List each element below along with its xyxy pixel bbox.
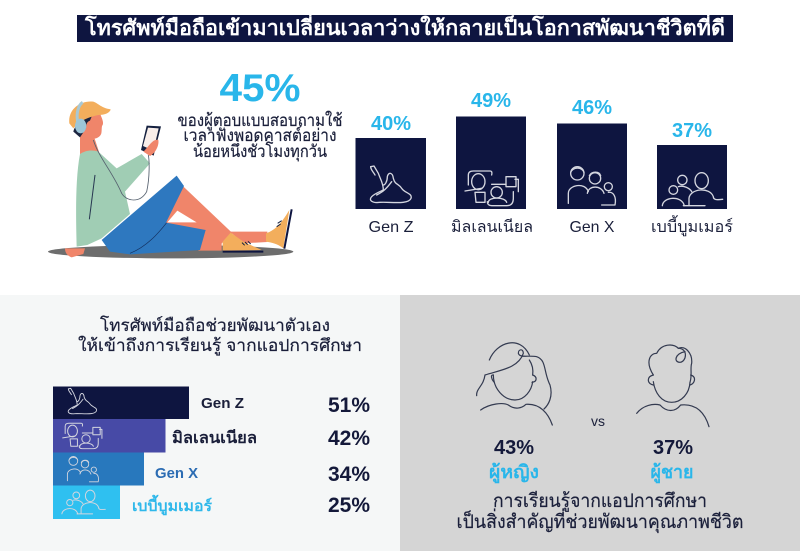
- conclusion text: [456, 490, 744, 534]
- icon: woman outline: [477, 343, 552, 425]
- stat: men 37%: ผู้ชาย: [650, 462, 694, 484]
- column: Gen Z: 40%: [371, 113, 411, 135]
- column: Baby Boomer: [651, 120, 733, 237]
- vs label: vs: [591, 413, 605, 429]
- conclusion text: การเรียนรู้จากแอปการศึกษา: [493, 490, 707, 512]
- bar: Gen X 34%: [53, 452, 370, 486]
- headline stat: 45%: [220, 67, 300, 110]
- bar: Baby Boomer 25%: 25%: [328, 494, 370, 517]
- column: Millennial: มิลเลนเนียล: [451, 218, 533, 236]
- headline stat: น้อยหนึ่งชั่วโมงทุกวัน: [193, 139, 327, 162]
- title banner: โทรศัพท์มือถือเข้ามาเปลี่ยนเวลาว่างให้กลายเป็นโอกาสพัฒนาชีวิตที่ดี: [84, 12, 725, 40]
- column: Baby Boomer: 37%: [672, 120, 712, 142]
- icon: man outline: [637, 345, 709, 427]
- bar: Gen Z 51%: 51%: [328, 394, 370, 417]
- stat: men 37%: [650, 437, 694, 484]
- column: Gen Z: Gen Z: [368, 219, 414, 236]
- bar: Gen X 34%: 34%: [328, 463, 370, 486]
- headline stat: เวลาฟังพอดคาสต์อย่าง: [184, 126, 336, 145]
- panel heading: โทรศัพท์มือถือช่วยพัฒนาตัวเอง: [100, 315, 330, 335]
- column: Millennial: [451, 90, 533, 236]
- stat: men 37%: 37%: [653, 437, 693, 459]
- bar: Millennial 42%: 42%: [328, 427, 370, 450]
- bar: Baby Boomer 25%: เบบี้บูมเมอร์: [132, 494, 213, 516]
- headline stat: [178, 67, 342, 162]
- panel: education apps by generation: [0, 295, 400, 551]
- column: Baby Boomer: เบบี้บูมเมอร์: [651, 215, 733, 237]
- bar: Gen Z 51%: Gen Z: [201, 395, 244, 412]
- conclusion text: เป็นสิ่งสำคัญที่ช่วยพัฒนาคุณภาพชีวิต: [456, 508, 744, 534]
- illustration: man listening on phone: [48, 101, 293, 258]
- column: Gen X: 46%: [572, 97, 612, 119]
- stat: women 43%: 43%: [494, 437, 534, 459]
- column: Gen X: Gen X: [570, 219, 615, 236]
- bar: Gen Z 51%: [53, 386, 370, 419]
- bar: Gen X 34%: Gen X: [155, 465, 198, 482]
- headline stat: ของผู้ตอบแบบสอบถามใช้: [178, 110, 342, 131]
- bar: Baby Boomer 25%: [53, 486, 370, 519]
- bar: Millennial 42%: มิลเลนเนียล: [172, 428, 257, 447]
- column: Gen X: [557, 97, 627, 236]
- stat: women 43%: ผู้หญิง: [489, 462, 539, 484]
- panel: women vs men: [400, 295, 800, 551]
- panel heading: ให้เข้าถึงการเรียนรู้ จากแอปการศึกษา: [78, 335, 362, 356]
- panel heading: [78, 315, 362, 356]
- stat: women 43%: [489, 437, 539, 484]
- column: Millennial: 49%: [471, 90, 511, 112]
- bar: Millennial 42%: [53, 419, 370, 452]
- column: Gen Z: [356, 113, 426, 236]
